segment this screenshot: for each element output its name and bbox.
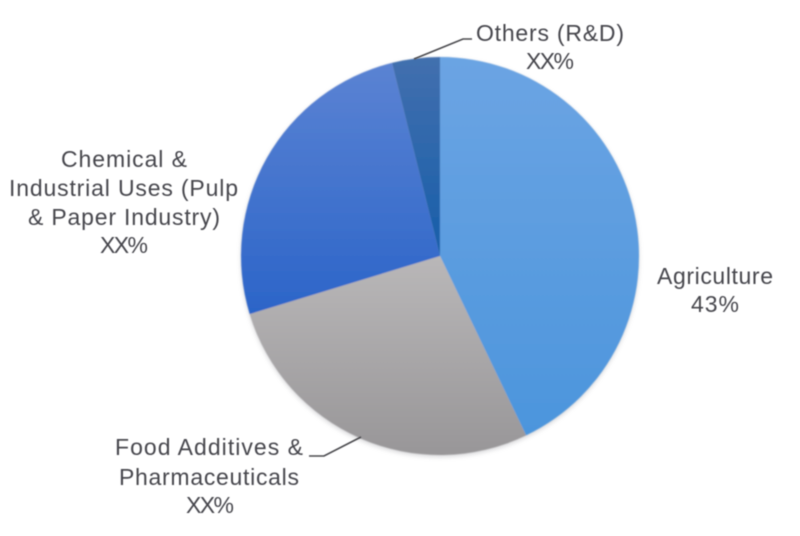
label: Chemical & Industrial Uses: XX% (100, 232, 148, 258)
label: Others (R&D) (476, 20, 624, 74)
label: Food Additives & Pharmaceuticals (115, 434, 303, 518)
label: Others (R&D): Others (R&D) (476, 20, 624, 46)
label: Chemical & Industrial Uses: Chemical & (61, 146, 187, 172)
label: Chemical & Industrial Uses (9, 146, 238, 258)
label: Food Additives & Pharmaceuticals: Food Additives & (115, 434, 303, 460)
label: Agriculture (657, 263, 773, 317)
pie chart (241, 57, 639, 455)
label: Agriculture: Agriculture (657, 263, 773, 289)
label: Chemical & Industrial Uses: & Paper Industry) (28, 204, 220, 230)
slice: Agriculture (440, 57, 639, 435)
label: Chemical & Industrial Uses: Industrial Uses (Pulp (9, 175, 238, 201)
slice: Others (R&D) (392, 57, 440, 256)
pie shadow (241, 59, 639, 457)
label: Food Additives & Pharmaceuticals: Pharmaceuticals (119, 464, 299, 490)
leader line: Food Additives (309, 437, 361, 456)
slice: Chemical & Industrial Uses (241, 63, 440, 314)
label: Agriculture: 43% (691, 291, 739, 317)
label: Others (R&D): XX% (526, 48, 574, 74)
slice: Food Additives & Pharmaceuticals (250, 256, 526, 455)
label: Food Additives & Pharmaceuticals: XX% (186, 492, 234, 518)
leader line: Others (414, 39, 472, 59)
